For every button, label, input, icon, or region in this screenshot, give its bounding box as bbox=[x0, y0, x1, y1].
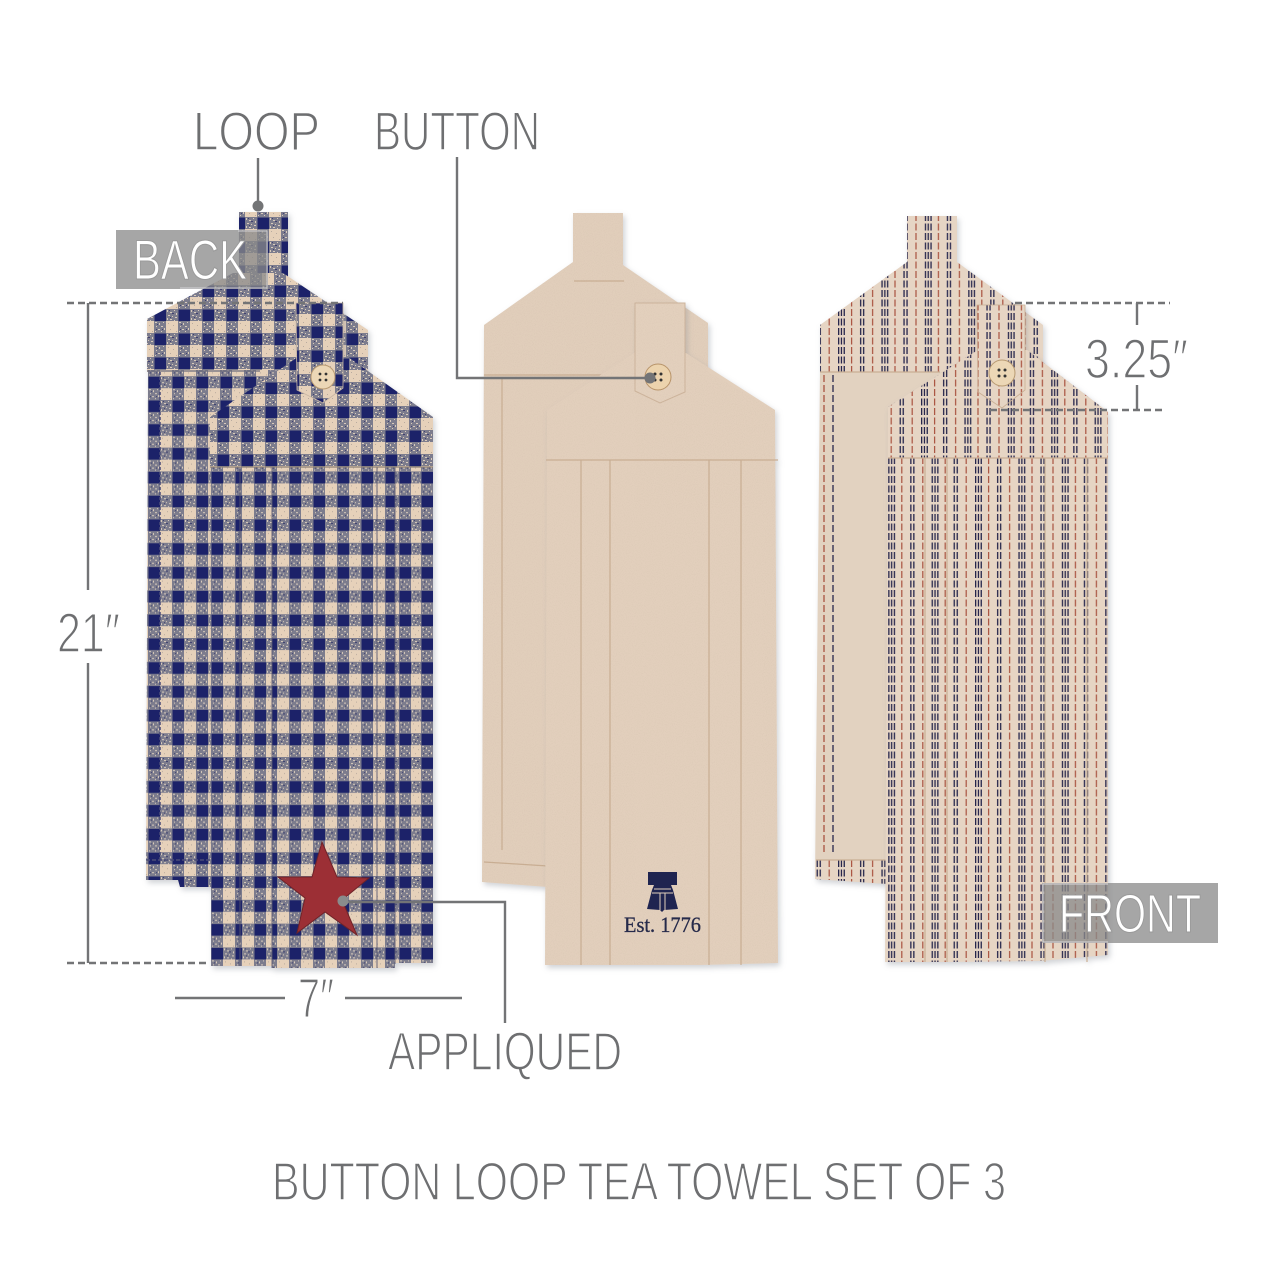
icon: liberty bell bbox=[647, 872, 678, 912]
towel set: dashed stripes bbox=[815, 216, 1108, 962]
dimension: 3.25 inch loop bbox=[990, 303, 1188, 410]
label: BUTTON: BUTTON bbox=[374, 100, 540, 162]
towel set: navy gingham with star bbox=[146, 212, 433, 968]
callout line: appliqued bbox=[338, 896, 505, 1023]
embroidered text: Est. 1776: Est. 1776 bbox=[624, 912, 701, 937]
label: APPLIQUED: APPLIQUED bbox=[388, 1022, 622, 1082]
dimension: 7 inch width: 7″ bbox=[298, 966, 334, 1029]
towel set: plain with bell bbox=[480, 210, 780, 970]
front stripe towel bbox=[885, 305, 1108, 962]
back plain towel bbox=[482, 213, 708, 887]
icon: wooden button bbox=[311, 365, 335, 389]
dimension: 3.25 inch loop: 3.25″ bbox=[1085, 327, 1188, 390]
tag: BACK: BACK bbox=[133, 228, 247, 291]
back gingham towel bbox=[146, 212, 368, 887]
back stripe towel bbox=[815, 216, 1043, 884]
icon: appliqued red star bbox=[278, 842, 369, 935]
icon: wooden button bbox=[645, 364, 671, 390]
label: LOOP: LOOP bbox=[193, 100, 320, 162]
dimension: 21 inch height bbox=[57, 303, 343, 963]
icon: wooden button bbox=[989, 360, 1015, 386]
front plain towel bbox=[545, 303, 778, 965]
dimension: 21 inch height: 21″ bbox=[57, 601, 120, 664]
callout line: button bbox=[457, 157, 656, 384]
title: BUTTON LOOP TEA TOWEL SET OF 3 bbox=[272, 1152, 1006, 1212]
front gingham towel bbox=[210, 303, 433, 968]
callout line: loop bbox=[252, 158, 264, 212]
tag: FRONT: FRONT bbox=[1059, 884, 1201, 944]
fabric weave texture bbox=[480, 210, 780, 970]
